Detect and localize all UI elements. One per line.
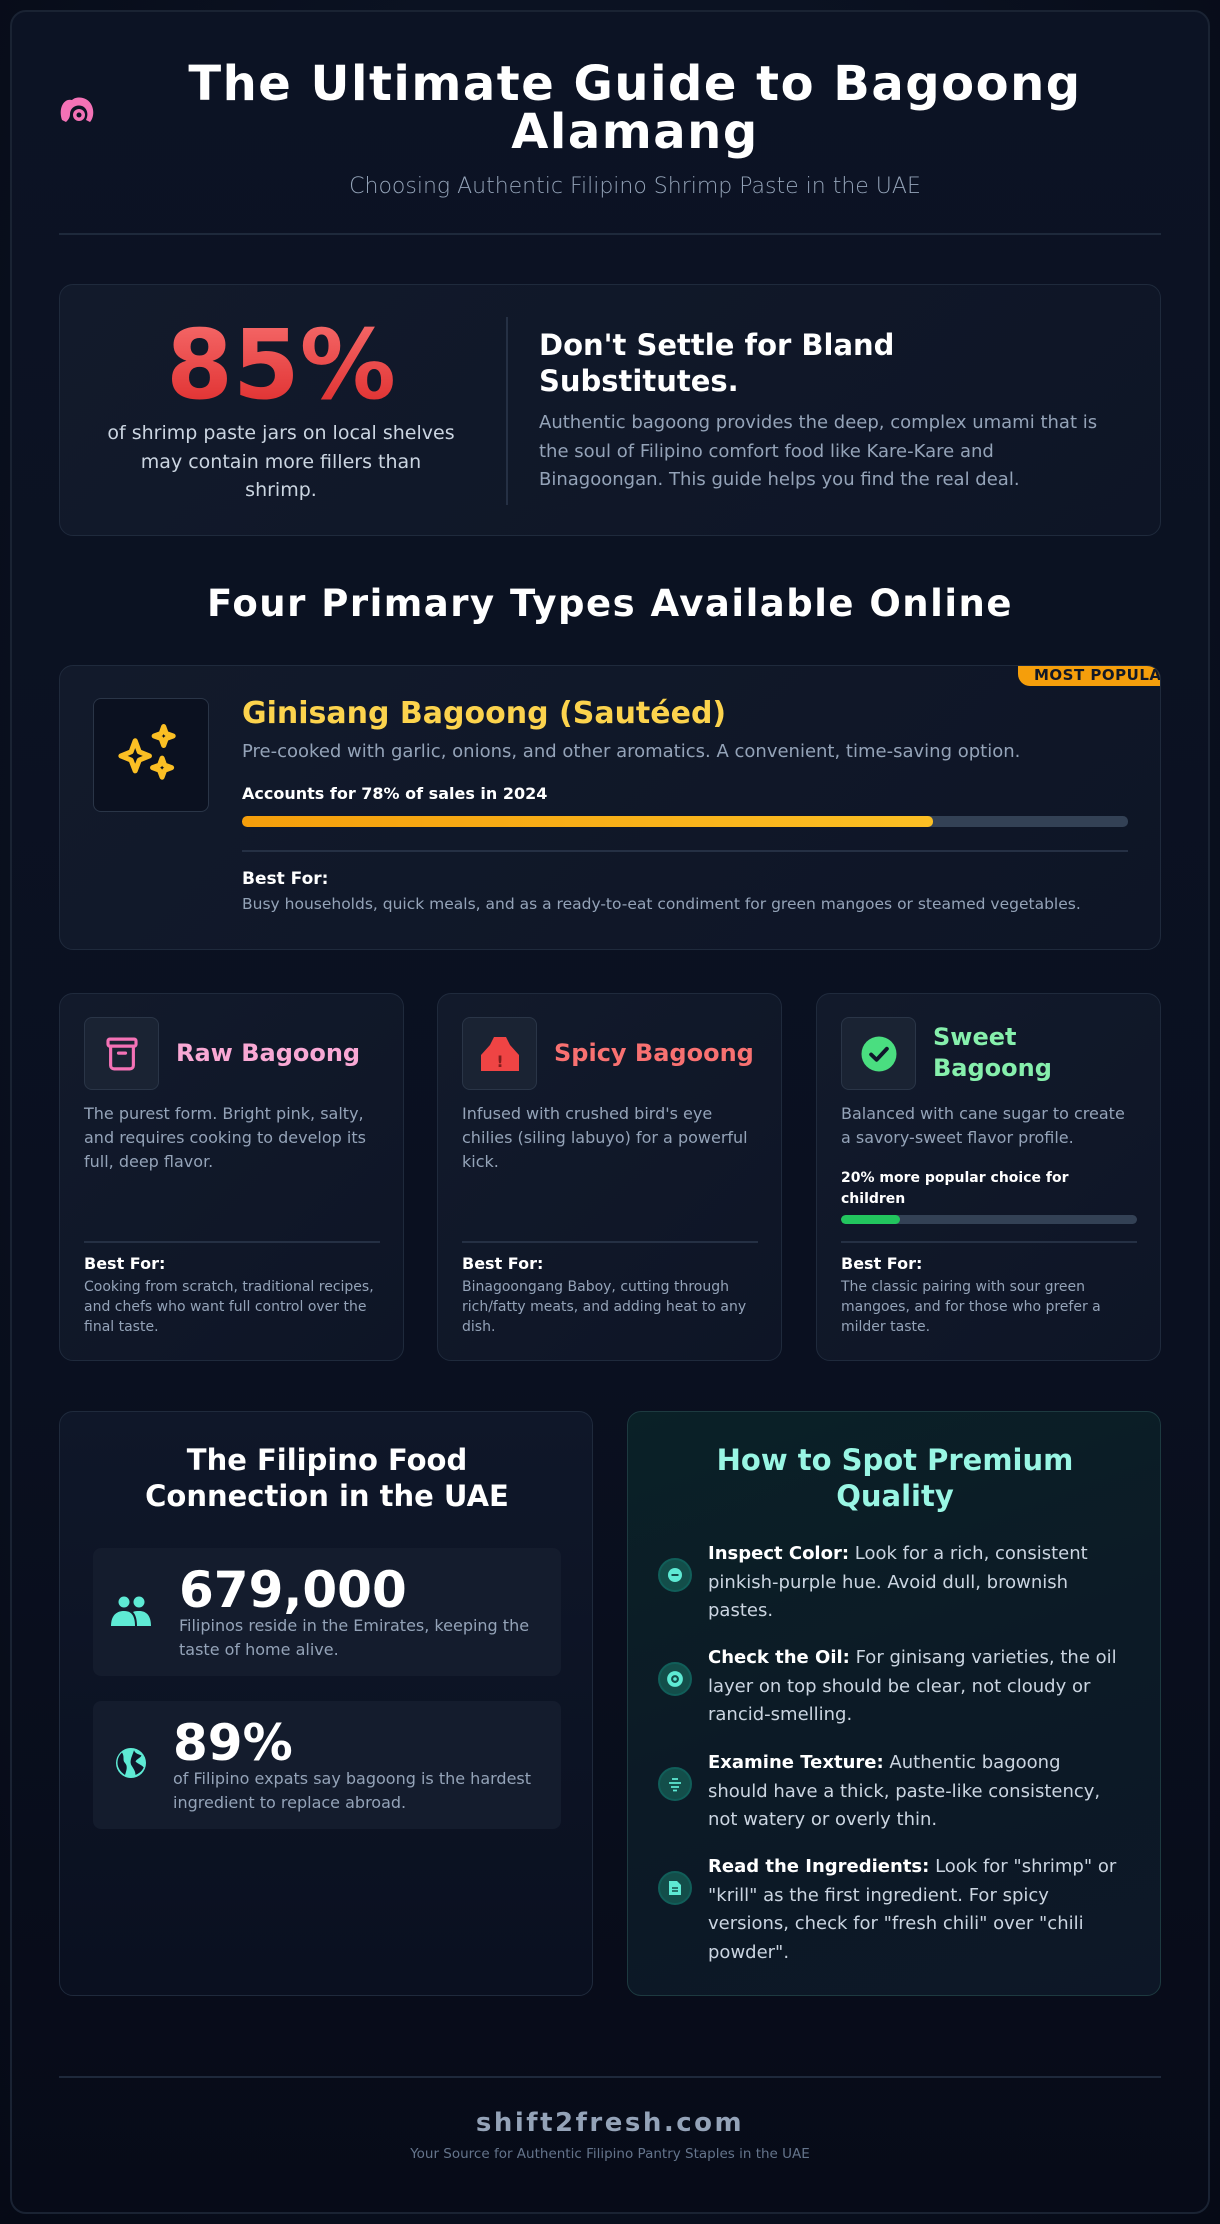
icon: sparkles	[93, 698, 209, 812]
icon: eye	[658, 1662, 692, 1696]
icon: check	[841, 1017, 916, 1090]
stat label: 20% more popular choice for children	[841, 1170, 1068, 1207]
number: 89%	[173, 1714, 293, 1772]
stat caption: of shrimp paste jars on local shelves may contain more fillers than shrimp.	[107, 422, 455, 501]
best for	[462, 1254, 746, 1335]
icon: globe	[116, 1748, 146, 1778]
best for: Best For:	[841, 1254, 922, 1273]
card title	[933, 1023, 1052, 1082]
tip: check the oil: Check the Oil: For ginisang varieties, the oil layer on top should be clear, not cloudy or rancid-smelling.	[708, 1647, 1117, 1725]
best for: Best For:	[84, 1254, 165, 1273]
best for: Cooking from scratch, traditional recipes, and chefs who want full control over the final taste.	[84, 1279, 374, 1335]
panel: spicy bagoong	[437, 993, 782, 1361]
bar chart: 78%	[242, 816, 1128, 827]
best for: Binagoongang Baboy, cutting through rich/fatty meats, and adding heat to any dish.	[462, 1279, 746, 1335]
title: Alamang	[511, 104, 759, 160]
description: The purest form. Bright pink, salty, and requires cooking to develop its full, deep flavor.	[84, 1104, 366, 1171]
icon: lines	[658, 1767, 692, 1801]
best for	[242, 869, 1081, 913]
best for: Best For:	[242, 869, 328, 889]
icon: document	[658, 1871, 692, 1905]
bar chart: 20%	[841, 1215, 1137, 1224]
panel heading: How to Spot Premium	[717, 1443, 1073, 1477]
tip: examine texture: Examine Texture: Authentic bagoong	[708, 1752, 1060, 1773]
tip: examine texture: should have a thick, paste-like consistency, not watery or overly thin.	[708, 1780, 1100, 1830]
big stat 85%: 85%	[166, 309, 396, 421]
panel: raw bagoong	[59, 993, 404, 1361]
caption: Filipinos reside in the Emirates, keeping the taste of home alive.	[179, 1616, 529, 1659]
logo icon	[60, 98, 94, 122]
tip: examine texture	[658, 1752, 1100, 1830]
panel: ginisang bagoong	[59, 665, 1161, 950]
panel heading	[145, 1443, 509, 1513]
heading: don't settle	[539, 328, 894, 398]
icon: minus	[658, 1558, 692, 1592]
stat box: 89%	[93, 1701, 561, 1829]
icon: warning	[462, 1017, 537, 1090]
card title: Sweet	[933, 1023, 1016, 1051]
footer tagline: Your Source for Authentic Filipino Pantry Staples in the UAE	[410, 2146, 810, 2162]
title	[188, 56, 1082, 160]
stat box: 679,000	[93, 1548, 561, 1676]
icon: warning: !	[496, 1052, 503, 1070]
panel heading	[717, 1443, 1073, 1513]
panel heading: The Filipino Food	[187, 1443, 467, 1477]
panel heading: Connection in the UAE	[145, 1479, 509, 1513]
badge: most popular	[1018, 654, 1178, 686]
footer brand: shift2fresh.com	[476, 2108, 744, 2138]
card title: Ginisang Bagoong (Sautéed)	[242, 696, 726, 731]
icon: jar	[84, 1017, 159, 1090]
panel: sweet bagoong	[816, 993, 1161, 1361]
panel: filipino food connection	[59, 1411, 593, 1996]
card description: Pre-cooked with garlic, onions, and other aromatics. A convenient, time-saving option.	[242, 741, 1020, 762]
description: Infused with crushed bird's eye chilies (siling labuyo) for a powerful kick.	[462, 1104, 748, 1171]
title: The Ultimate Guide to Bagoong	[188, 56, 1082, 112]
panel: key stat	[59, 284, 1161, 536]
section heading: Four Primary Types Available Online	[207, 582, 1013, 625]
card title: Spicy Bagoong	[554, 1039, 754, 1067]
best for	[84, 1254, 374, 1335]
big stat 85%	[60, 307, 502, 423]
intro text: Authentic bagoong provides the deep, complex umami that is the soul of Filipino comfort food like Kare-Kare and Binagoongan. This guide helps you find the real deal.	[539, 412, 1097, 490]
best for: Busy households, quick meals, and as a ready-to-eat condiment for green mangoes or steamed vegetables.	[242, 895, 1081, 913]
heading: don't settle: Substitutes.	[539, 364, 739, 398]
card title: Raw Bagoong	[176, 1039, 360, 1067]
number: 679,000	[179, 1561, 407, 1619]
tip: inspect color: Inspect Color: Look for a rich, consistent pinkish-purple hue. Avoid dull, brownish pastes.	[708, 1543, 1088, 1621]
panel: premium quality	[627, 1411, 1161, 1996]
quality tips list	[658, 1543, 1117, 1962]
stat label: Accounts for 78% of sales in 2024	[242, 784, 547, 803]
best for	[840, 1254, 1101, 1335]
icon: people	[111, 1596, 151, 1626]
caption: of Filipino expats say bagoong is the hardest ingredient to replace abroad.	[173, 1769, 531, 1812]
best for: Best For:	[462, 1254, 543, 1273]
heading: don't settle: Don't Settle for Bland	[539, 328, 894, 362]
card title: Bagoong	[933, 1054, 1052, 1082]
best for: The classic pairing with sour green mangoes, and for those who prefer a milder taste.	[841, 1279, 1101, 1335]
subtitle: Choosing Authentic Filipino Shrimp Paste in the UAE	[349, 174, 921, 199]
description: Balanced with cane sugar to create a savory-sweet flavor profile.	[841, 1104, 1125, 1147]
panel heading: Quality	[836, 1479, 954, 1513]
tip: read ingredients: Read the Ingredients: Look for "shrimp" or "krill" as the first ingredient. For spicy versions, check for "fresh chili" over "chili powder".	[708, 1856, 1116, 1962]
